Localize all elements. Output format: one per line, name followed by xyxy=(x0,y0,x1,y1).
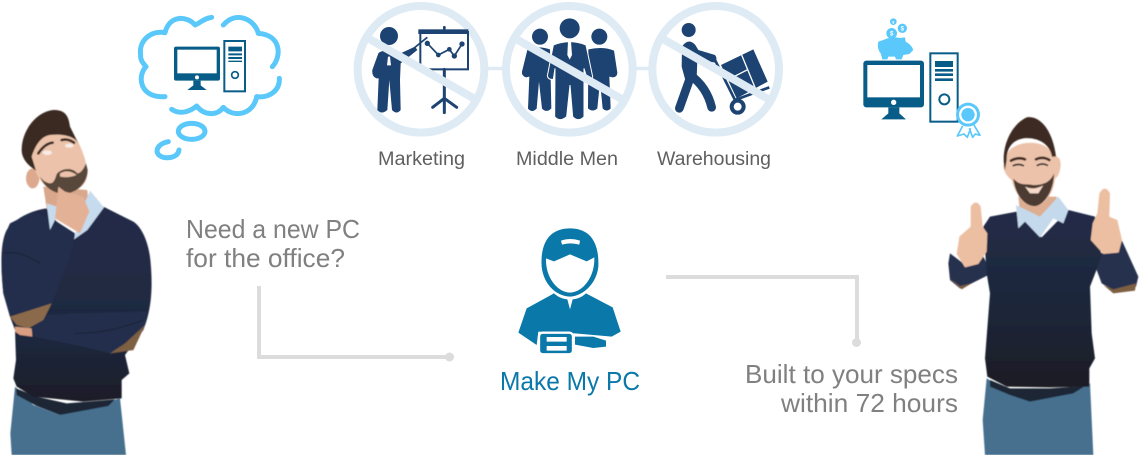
text: need a new PC: Need a new PC xyxy=(186,214,360,244)
connector lines between no-go circles xyxy=(486,67,652,70)
icon: no marketing xyxy=(358,6,484,133)
icon: PC with savings and quality badge: $ xyxy=(890,32,894,38)
text: built to your specs: Built to your specs xyxy=(745,359,958,389)
icon: technician xyxy=(518,228,621,354)
label: Make My PC: Make My PC xyxy=(500,366,640,396)
thought cloud icon xyxy=(140,17,279,158)
label: Marketing: Marketing xyxy=(378,149,465,170)
arrow: Make My PC to built xyxy=(666,277,861,347)
photo: thinking man xyxy=(1,110,152,455)
icon: PC with savings and quality badge xyxy=(863,18,980,137)
text: built to your specs: within 72 hours xyxy=(780,388,958,418)
arrow: need to Make My PC xyxy=(259,286,454,362)
text: need a new PC: for the office? xyxy=(186,243,345,273)
icon: no middle men xyxy=(506,6,633,133)
photo: thumbs-up man xyxy=(948,117,1138,455)
icon: no warehousing xyxy=(652,6,779,133)
label: Warehousing: Warehousing xyxy=(657,149,771,170)
icon: PC with savings and quality badge: $ xyxy=(901,27,905,33)
icon: PC with savings and quality badge: $ xyxy=(892,20,894,24)
label: Middle Men: Middle Men xyxy=(516,149,618,170)
